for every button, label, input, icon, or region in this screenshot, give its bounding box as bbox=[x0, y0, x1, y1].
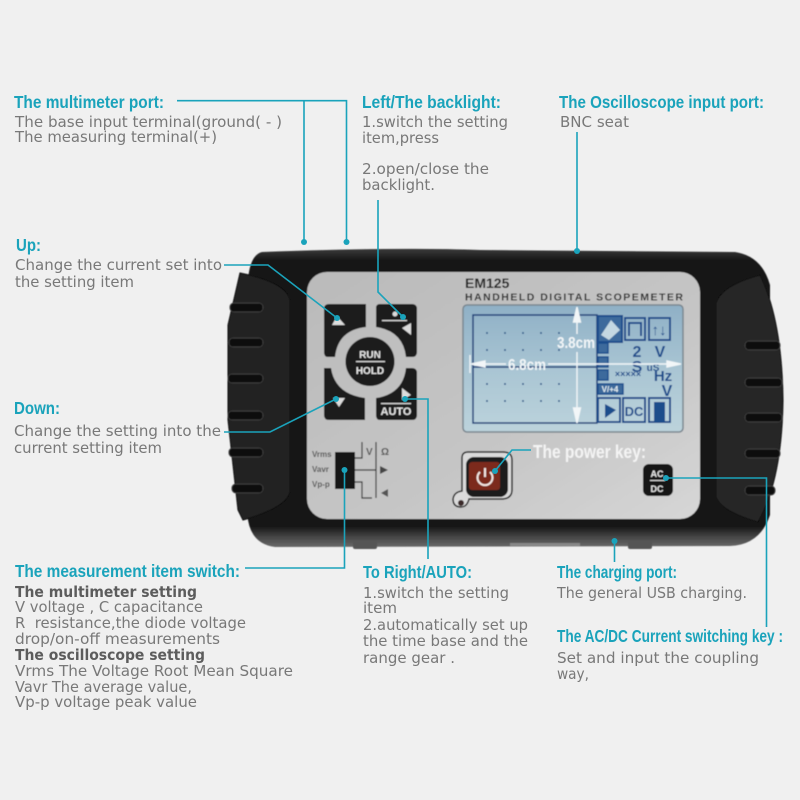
left rubber grip bbox=[228, 273, 290, 520]
callout: right / auto: the time base and the bbox=[363, 632, 528, 650]
AC/DC button bbox=[643, 464, 673, 496]
callout: right / auto: 2.automatically set up bbox=[363, 616, 528, 634]
measurement switch: Ω bbox=[381, 447, 389, 458]
callout: measurement item switch: drop/on-off measurements bbox=[15, 630, 220, 648]
callout: backlight: item,press bbox=[362, 129, 439, 147]
LCD readouts: Hz bbox=[654, 368, 672, 385]
callout: up bbox=[15, 235, 340, 321]
LCD readouts: V bbox=[655, 344, 666, 361]
power button bbox=[453, 452, 512, 507]
device body bbox=[248, 249, 770, 547]
LCD readouts: V/+4 bbox=[602, 385, 619, 394]
callout: charging port: The charging port: bbox=[557, 562, 677, 582]
LCD readouts: 2 bbox=[633, 344, 642, 361]
bottom connector tabs bbox=[353, 541, 652, 549]
callout: right / auto bbox=[363, 396, 528, 667]
LCD screen: 6.8cm bbox=[508, 357, 546, 374]
callout: measurement item switch bbox=[15, 467, 348, 711]
callout: measurement item switch: Vavr The average value, bbox=[15, 678, 192, 696]
scopemeter device bbox=[228, 249, 783, 549]
callout: oscilloscope input port: BNC seat bbox=[560, 113, 629, 131]
callout: measurement item switch: R resistance,the diode voltage bbox=[15, 614, 246, 632]
down button bbox=[324, 368, 365, 420]
button arrows bbox=[332, 312, 411, 407]
LCD readouts: uS bbox=[647, 363, 660, 374]
measurement switch: Vrms bbox=[312, 450, 332, 459]
auto button bbox=[376, 368, 417, 420]
LCD readouts bbox=[602, 322, 673, 419]
LCD icons bbox=[598, 316, 670, 422]
AUTO label: AUTO bbox=[381, 406, 412, 418]
callout: backlight: backlight. bbox=[362, 176, 435, 194]
right rubber grip bbox=[716, 275, 783, 522]
callout: charging port bbox=[556, 538, 747, 602]
callout: backlight: Left/The backlight: bbox=[362, 92, 501, 112]
callout: down bbox=[14, 396, 339, 457]
AC/DC button: DC bbox=[650, 484, 664, 494]
callout: right / auto: range gear . bbox=[363, 649, 455, 667]
callout: right / auto: item bbox=[363, 599, 397, 617]
callout: up: the setting item bbox=[15, 273, 134, 291]
waveform grid bbox=[473, 315, 597, 423]
callout: measurement item switch: The measurement item switch: bbox=[15, 561, 240, 581]
LCD readouts: ↑↓ bbox=[652, 322, 666, 339]
callout: multimeter port bbox=[14, 92, 350, 245]
callout: right / auto: To Right/AUTO: bbox=[363, 562, 472, 582]
dimension arrows bbox=[470, 307, 681, 423]
callout: charging port: The general USB charging. bbox=[556, 584, 747, 602]
up button bbox=[324, 304, 366, 357]
callout: up: Change the current set into bbox=[15, 256, 222, 274]
callout: measurement item switch: Vrms The Voltage Root Mean Square bbox=[15, 662, 293, 680]
callout: multimeter port: The measuring terminal(+) bbox=[14, 128, 217, 146]
left / backlight button bbox=[376, 304, 417, 357]
measurement switch: Vavr bbox=[312, 465, 329, 474]
LCD readouts: V bbox=[662, 383, 673, 400]
callout: AC/DC switching key bbox=[557, 475, 783, 683]
measurement switch: Vp-p bbox=[312, 480, 330, 489]
model title bbox=[465, 275, 683, 304]
run/hold button bbox=[346, 337, 394, 386]
callout: right / auto: 1.switch the setting bbox=[363, 584, 509, 602]
measurement switch: V bbox=[366, 447, 373, 458]
callout: AC/DC switching key: way, bbox=[557, 665, 589, 683]
LCD readouts: S bbox=[632, 359, 643, 376]
measurement switch bbox=[312, 442, 389, 498]
grey front panel bbox=[307, 272, 700, 519]
callout: down: current setting item bbox=[14, 439, 162, 457]
callout: multimeter port: The multimeter port: bbox=[14, 92, 164, 112]
callout: down: Down: bbox=[14, 398, 60, 418]
model title: EM125 bbox=[465, 275, 510, 291]
callout: power key leader bbox=[492, 450, 531, 474]
LCD screen bbox=[463, 305, 683, 432]
callout: oscilloscope input port bbox=[559, 92, 764, 254]
callout: measurement item switch: Vp-p voltage peak value bbox=[15, 693, 197, 711]
power key label: The power key: bbox=[533, 442, 646, 462]
callout: down: Change the setting into the bbox=[14, 422, 221, 440]
callout: measurement item switch: The oscilloscope setting bbox=[15, 646, 205, 664]
navigation buttons bbox=[324, 304, 417, 420]
callout: AC/DC switching key: Set and input the coupling bbox=[557, 649, 759, 667]
run/hold button: HOLD bbox=[356, 366, 384, 377]
callout: backlight: 2.open/close the bbox=[362, 160, 489, 178]
grip ridges bbox=[228, 303, 782, 495]
dimension labels: 3.8cm bbox=[557, 335, 595, 352]
LCD readouts: ××××× bbox=[615, 369, 641, 379]
callout: measurement item switch: The multimeter setting bbox=[15, 583, 197, 601]
callout: up: Up: bbox=[16, 235, 41, 255]
callout: measurement item switch: V voltage , C capacitance bbox=[15, 598, 203, 616]
AC/DC button: AC bbox=[650, 469, 664, 479]
callout: backlight: 1.switch the setting bbox=[362, 113, 508, 131]
callout: backlight bbox=[362, 92, 508, 320]
run/hold button: RUN bbox=[359, 350, 381, 361]
LCD readouts: DC bbox=[625, 404, 644, 419]
model title: HANDHELD DIGITAL SCOPEMETER bbox=[465, 292, 683, 304]
callout: multimeter port: The base input terminal(ground( - ) bbox=[14, 113, 282, 131]
callout: oscilloscope input port: The Oscilloscope input port: bbox=[559, 92, 764, 112]
